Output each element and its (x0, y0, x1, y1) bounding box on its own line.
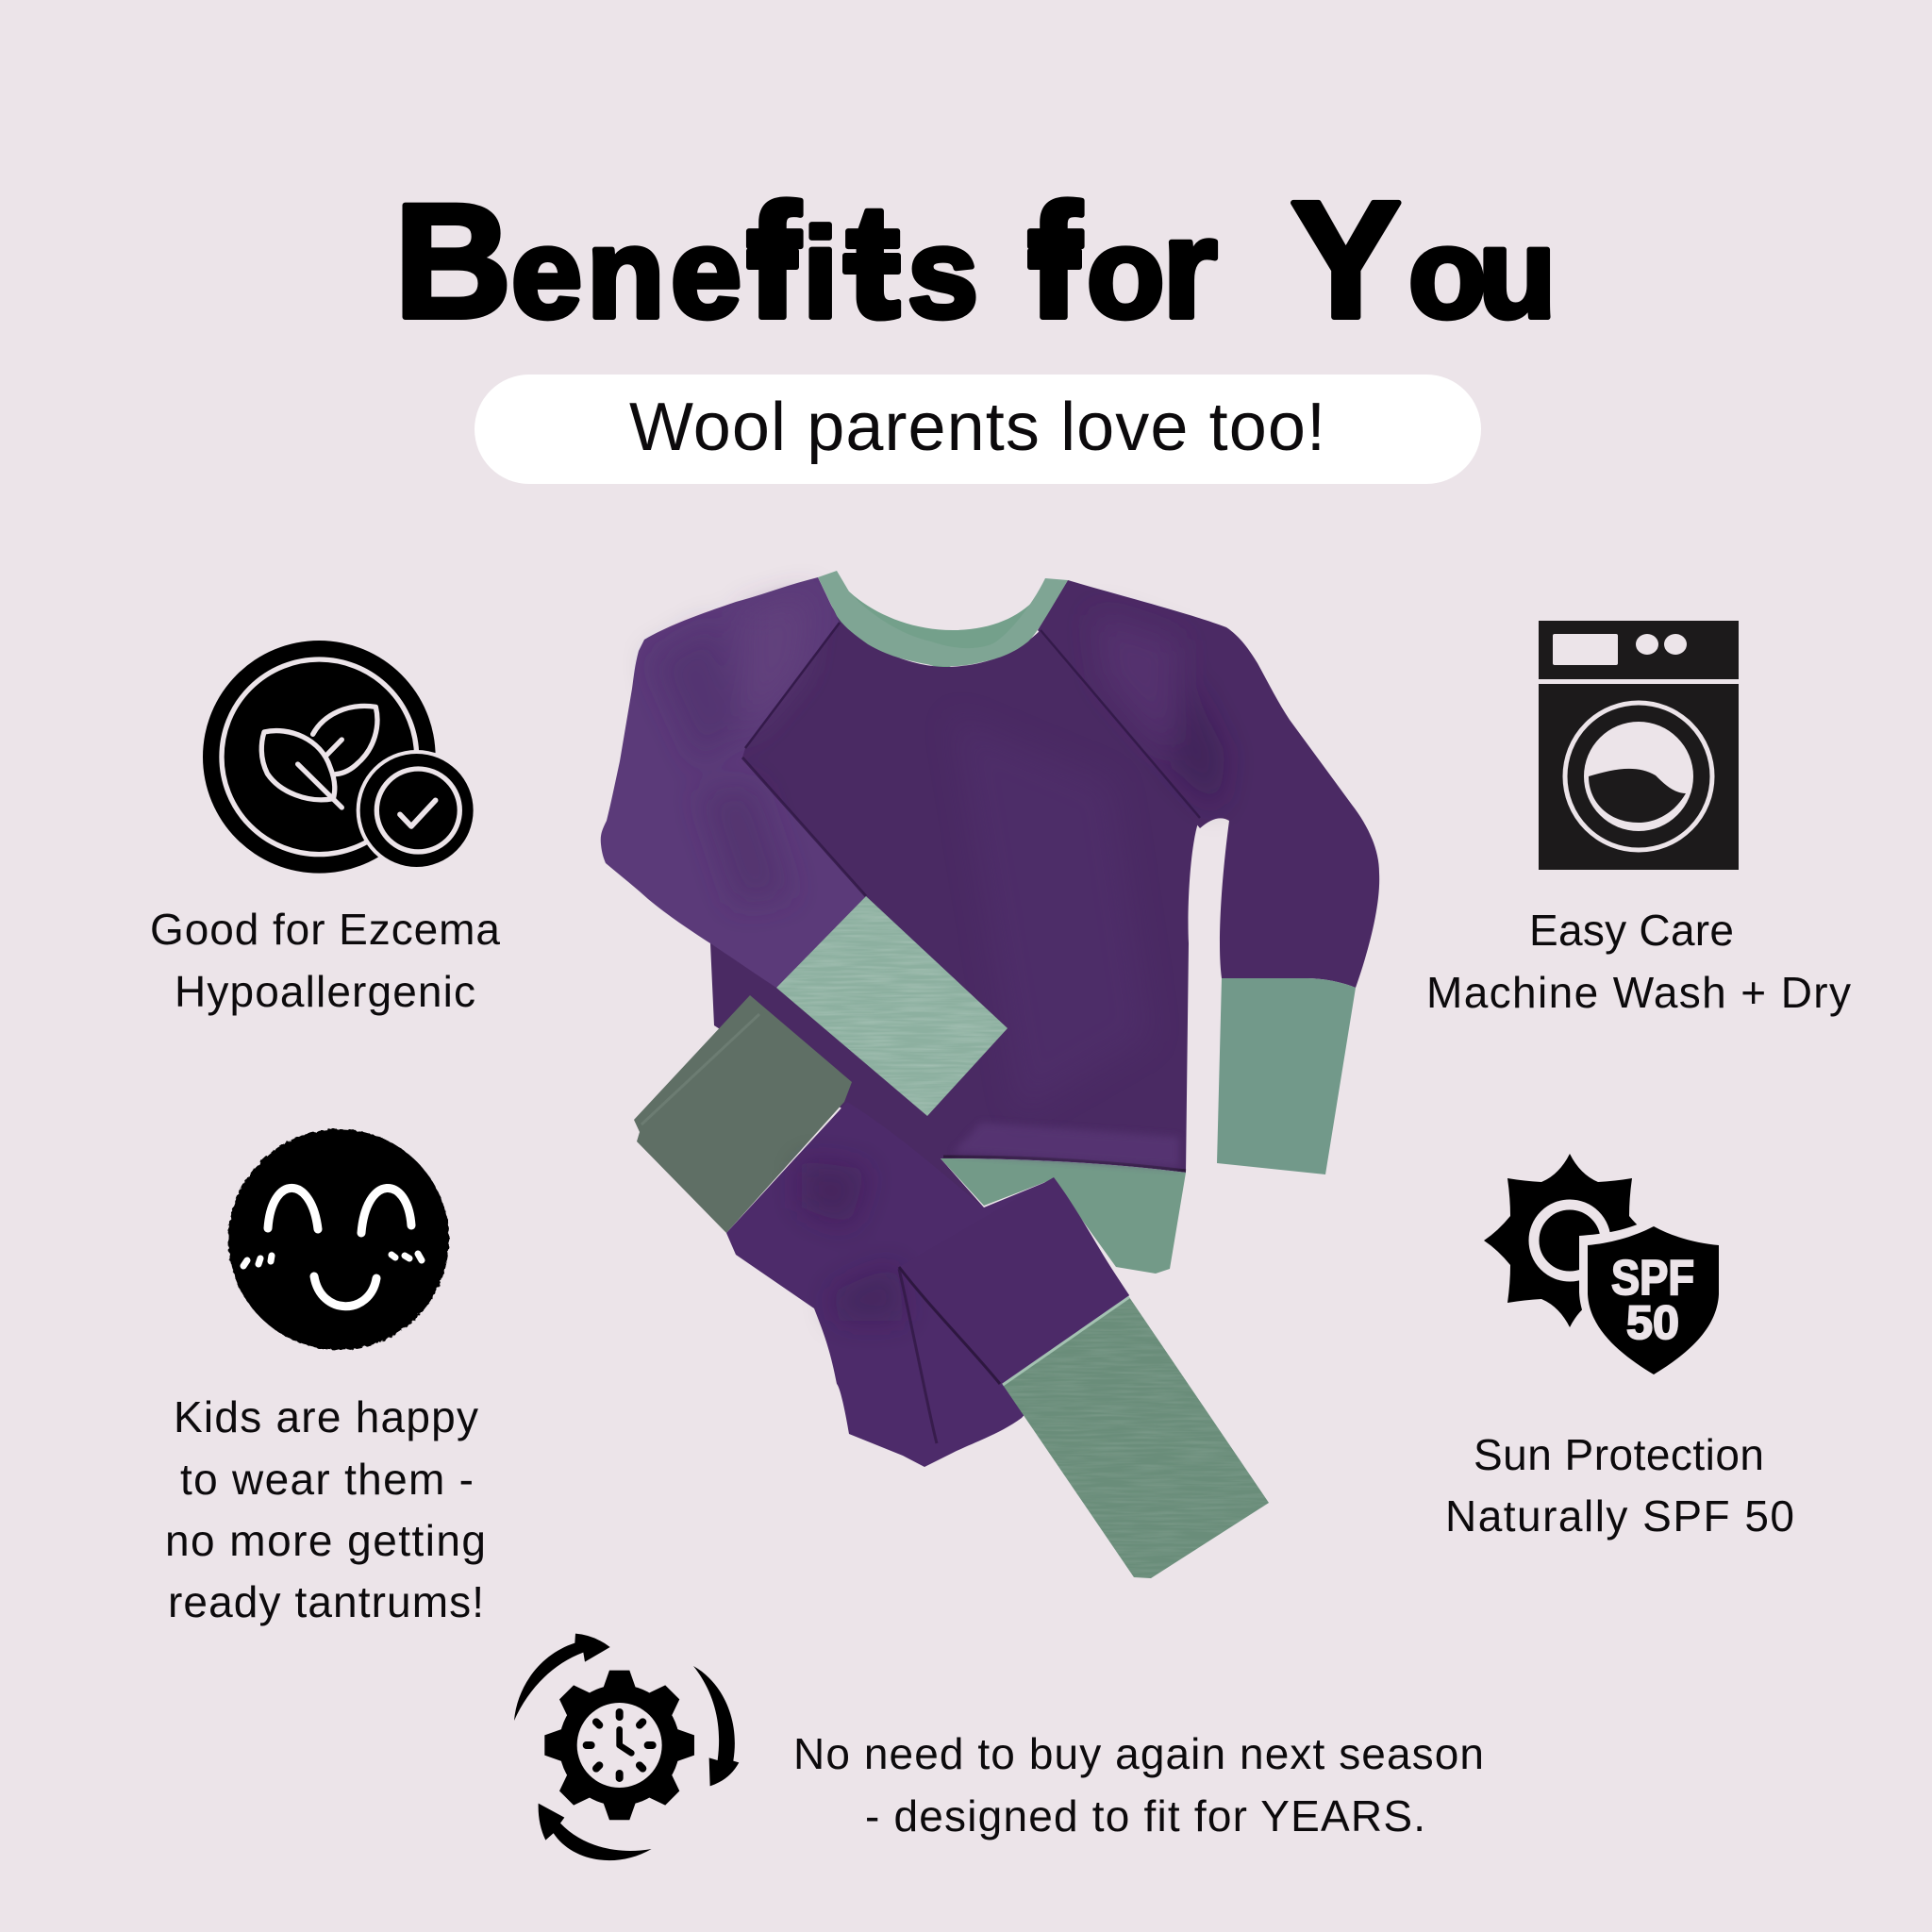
right cuff (1217, 978, 1356, 1174)
green leg cuff (1003, 1297, 1269, 1578)
back neck (849, 591, 1038, 670)
subtitle pill: Wool parents love too! (629, 390, 1325, 465)
gear (544, 1671, 694, 1820)
icon: sun and SPF shield (1484, 1154, 1728, 1383)
text: fit for years: - designed to fit for YEARS. (865, 1791, 1425, 1840)
raglan seams (745, 623, 1200, 818)
text: sun protection (1445, 1430, 1794, 1541)
arrow right (693, 1666, 739, 1786)
upper leg (899, 1177, 1129, 1384)
lower leg (726, 1102, 1129, 1467)
text: kids happy: Kids are happy (174, 1392, 478, 1441)
text: kids happy: ready tantrums! (168, 1577, 484, 1626)
text: easy care (1426, 906, 1851, 1017)
left sleeve (601, 577, 866, 988)
text: easy care: Easy Care (1529, 906, 1734, 955)
icon: smiling face (228, 1129, 449, 1350)
title: Benefits for You (394, 168, 1556, 353)
product photo: purple and green wool sweater and leggings (601, 571, 1379, 1578)
text: sun protection: Sun Protection (1474, 1430, 1764, 1479)
icon: sun and SPF shield: 50 (1626, 1296, 1679, 1349)
text: easy care: Machine Wash + Dry (1426, 968, 1851, 1017)
icon: clock gear with cycle arrows (514, 1634, 739, 1860)
subtitle pill (475, 375, 1481, 484)
text: eczema: Hypoallergenic (175, 967, 475, 1016)
grey leg cuff (634, 995, 852, 1233)
text: eczema (150, 905, 500, 1016)
body shading (953, 717, 1151, 1113)
sweater body (710, 604, 1200, 1208)
text: kids happy (165, 1392, 486, 1626)
text: fit for years (793, 1729, 1484, 1840)
hem (941, 1158, 1186, 1274)
arrow top (514, 1634, 610, 1721)
icon: washing machine (1539, 621, 1739, 870)
icon: leaf with check (203, 641, 477, 874)
left cuff (776, 896, 1008, 1116)
arrow bottom (539, 1804, 652, 1860)
collar (818, 571, 1068, 666)
text: eczema: Good for Ezcema (150, 905, 500, 954)
text: fit for years: No need to buy again next season (793, 1729, 1484, 1778)
text: kids happy: to wear them - (180, 1455, 474, 1504)
left sleeve shading (651, 594, 811, 906)
right sleeve (1038, 580, 1379, 988)
text: sun protection: Naturally SPF 50 (1445, 1491, 1794, 1541)
text: kids happy: no more getting (165, 1516, 486, 1565)
icon: sun and SPF shield: SPF (1611, 1251, 1694, 1306)
right sleeve folds (1094, 613, 1226, 811)
leg shading (802, 1160, 906, 1321)
leaves (261, 706, 377, 808)
